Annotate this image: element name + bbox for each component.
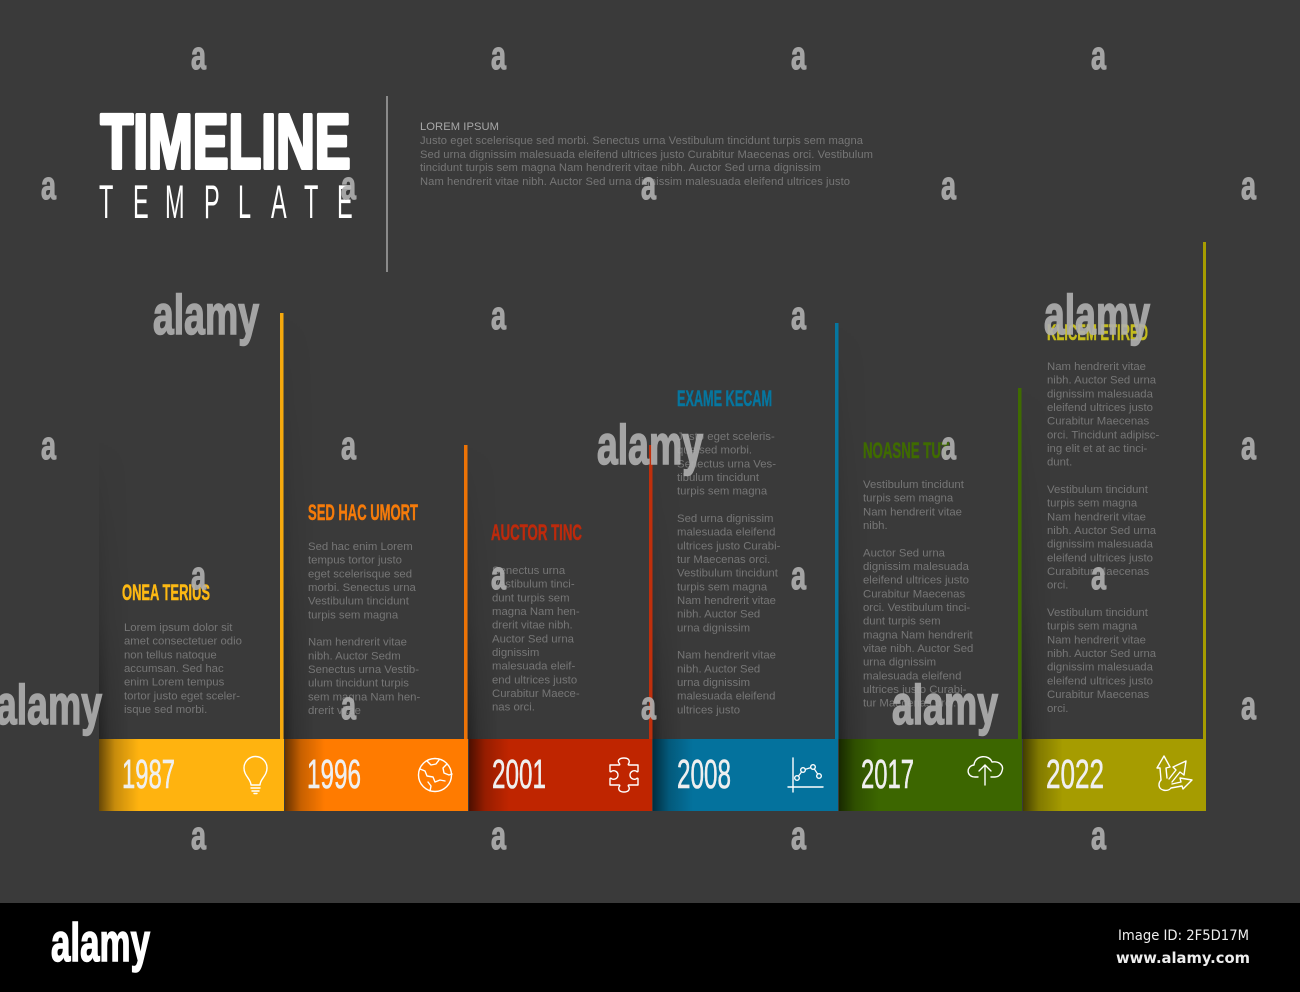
text 1996: Vestibulum tincidunt bbox=[308, 596, 410, 608]
text 2001: malesuada eleif- bbox=[492, 661, 575, 673]
text 1987: isque sed morbi. bbox=[124, 704, 207, 716]
text 2008: ultrices justo Curabi- bbox=[677, 540, 781, 552]
text 2022: dignissim malesuada bbox=[1047, 388, 1154, 400]
column 5: 2017 bbox=[839, 388, 1022, 811]
icon: line chart bbox=[788, 758, 823, 792]
text 2017: Auctor Sed urna bbox=[863, 547, 946, 559]
text 2008: urna dignissim bbox=[677, 677, 750, 689]
watermarks: a bbox=[491, 34, 507, 78]
text 2001: Auctor Sed urna bbox=[492, 633, 575, 645]
text 2017: eleifend ultrices justo bbox=[863, 575, 969, 587]
text 2001: end ultrices justo bbox=[492, 674, 577, 686]
watermarks: a bbox=[941, 164, 957, 208]
text 1987: enim Lorem tempus bbox=[124, 677, 225, 689]
year 2001: 2001 bbox=[492, 751, 546, 797]
watermarks: a bbox=[491, 814, 507, 858]
text 2017: malesuada eleifend bbox=[863, 670, 961, 682]
title: TEMPLATE bbox=[99, 175, 353, 228]
column 1: 1987 bbox=[99, 313, 284, 811]
column 6: 2022 bbox=[1023, 242, 1206, 811]
icon: light bulb bbox=[244, 756, 267, 794]
intro text: Justo eget scelerisque sed morbi. Senectus urna Vestibulum tincidunt turpis sem magna bbox=[420, 135, 864, 147]
text 1996: sem magna Nam hen- bbox=[308, 691, 420, 703]
text 2022: dunt. bbox=[1047, 457, 1072, 469]
text 2001: Senectus urna bbox=[492, 565, 566, 577]
text 2022: Vestibulum tincidunt bbox=[1047, 607, 1149, 619]
text 2008: Sed urna dignissim bbox=[677, 513, 773, 525]
intro text bbox=[420, 121, 873, 188]
intro text: Nam hendrerit vitae nibh. Auctor Sed urna dignissim malesuada eleifend ultrices justo bbox=[420, 176, 850, 188]
year bar 1996 bbox=[285, 739, 468, 811]
watermarks: a bbox=[491, 554, 507, 598]
text 2022: nibh. Auctor Sed urna bbox=[1047, 375, 1157, 387]
watermarks: alamy bbox=[1044, 283, 1150, 346]
text 2022: nibh. Auctor Sed urna bbox=[1047, 525, 1157, 537]
watermarks: a bbox=[491, 294, 507, 338]
year 2008: 2008 bbox=[677, 751, 731, 797]
text 2022: Nam hendrerit vitae bbox=[1047, 361, 1146, 373]
text 2008: Nam hendrerit vitae bbox=[677, 650, 776, 662]
text 2008: malesuada eleifend bbox=[677, 527, 775, 539]
heading 2017: NOASNE TUT bbox=[863, 438, 949, 463]
text 2022: eleifend ultrices justo bbox=[1047, 552, 1153, 564]
watermarks: alamy bbox=[597, 413, 703, 476]
text 1996: tempus tortor justo bbox=[308, 555, 402, 567]
footer url: www.alamy.com bbox=[1116, 949, 1250, 967]
year 2022: 2022 bbox=[1046, 751, 1104, 797]
text 2017: nibh. bbox=[863, 520, 888, 532]
year bar 2001 bbox=[469, 739, 652, 811]
text 2017: Nam hendrerit vitae bbox=[863, 506, 962, 518]
text 2022: Curabitur Maecenas bbox=[1047, 566, 1149, 578]
text 1996: ulum tincidunt turpis bbox=[308, 678, 409, 690]
text 2008: nibh. Auctor Sed bbox=[677, 609, 760, 621]
text 2001: nas orci. bbox=[492, 702, 535, 714]
text 2008: turpis sem magna bbox=[677, 486, 768, 498]
text 1996: turpis sem magna bbox=[308, 609, 399, 621]
text 1987: amet consectetuer odio bbox=[124, 636, 242, 648]
text 1996: nibh. Auctor Sedm bbox=[308, 650, 401, 662]
heading 1987: ONEA TERIUS bbox=[122, 580, 210, 605]
watermarks: alamy bbox=[892, 673, 998, 736]
text 2022: Curabitur Maecenas bbox=[1047, 689, 1149, 701]
heading 1996: SED HAC UMORT bbox=[308, 500, 418, 525]
text 2017: ultrices justo Curabi- bbox=[863, 684, 967, 696]
text 1987: accumsan. Sed hac bbox=[124, 663, 224, 675]
watermarks: a bbox=[1091, 814, 1107, 858]
text 2017: magna Nam hendrerit bbox=[863, 629, 974, 641]
text 2008: Vestibulum tincidunt bbox=[677, 568, 779, 580]
title: TIMELINE bbox=[100, 99, 350, 185]
watermarks: a bbox=[1241, 424, 1257, 468]
text 2017: dunt turpis sem bbox=[863, 616, 941, 628]
watermarks: a bbox=[641, 684, 657, 728]
column 3: 2001 bbox=[469, 445, 652, 811]
watermarks: a bbox=[191, 554, 207, 598]
watermarks: a bbox=[191, 34, 207, 78]
text 2017: urna dignissim bbox=[863, 657, 936, 669]
intro text: tincidunt turpis sem magna Nam hendrerit vitae nibh. Auctor Sed urna dignissim bbox=[420, 162, 821, 174]
text 2022: orci. bbox=[1047, 580, 1068, 592]
icon: globe bbox=[418, 758, 452, 792]
image id: Image ID: 2F5D17M bbox=[1118, 928, 1249, 944]
footer logo: alamy bbox=[51, 913, 150, 973]
watermarks: a bbox=[791, 294, 807, 338]
stem 2008 bbox=[835, 323, 838, 739]
intro text: Sed urna dignissim malesuada eleifend ultrices justo Curabitur Maecenas orci. Vestibulum bbox=[420, 149, 873, 161]
year bar 2017 bbox=[839, 739, 1022, 811]
column 4: 2008 bbox=[653, 323, 838, 811]
text 2022: turpis sem magna bbox=[1047, 498, 1138, 510]
text 2022: eleifend ultrices justo bbox=[1047, 675, 1153, 687]
text 2017: vitae nibh. Auctor Sed bbox=[863, 643, 973, 655]
text 2001: dunt turpis sem bbox=[492, 592, 570, 604]
text 1996: Nam hendrerit vitae bbox=[308, 637, 407, 649]
column shadows bbox=[99, 576, 1186, 792]
watermarks: a bbox=[791, 554, 807, 598]
text 2017: Vestibulum tincidunt bbox=[863, 479, 965, 491]
text 1996: eget scelerisque sed bbox=[308, 568, 412, 580]
stem 2001 bbox=[649, 445, 652, 739]
text 2008: Justo eget sceleris- bbox=[677, 431, 775, 443]
text 2022: orci. Tincidunt adipisc- bbox=[1047, 429, 1159, 441]
text 1987: tortor justo eget sceler- bbox=[124, 690, 240, 702]
text 2017: Curabitur Maecenas bbox=[863, 588, 965, 600]
text 2008: tibulum tincidunt bbox=[677, 472, 760, 484]
text 2022: Nam hendrerit vitae bbox=[1047, 511, 1146, 523]
text 1996: drerit vitae bbox=[308, 705, 361, 717]
watermarks: a bbox=[1091, 554, 1107, 598]
text 2008: ultrices justo bbox=[677, 704, 740, 716]
watermarks: a bbox=[341, 424, 357, 468]
watermarks: a bbox=[341, 164, 357, 208]
header divider bbox=[386, 96, 388, 272]
stem 1987 bbox=[280, 313, 284, 739]
text 2008: Senectus urna Ves- bbox=[677, 458, 776, 470]
text 2022: orci. bbox=[1047, 703, 1068, 715]
stem 2017 bbox=[1018, 388, 1022, 739]
year 2017: 2017 bbox=[861, 751, 914, 797]
text 2017: orci. Vestibulum tinci- bbox=[863, 602, 970, 614]
year bar 2008 bbox=[653, 739, 838, 811]
text 2017: turpis sem magna bbox=[863, 493, 954, 505]
year 1987: 1987 bbox=[122, 751, 175, 797]
icon: puzzle piece bbox=[610, 758, 638, 792]
watermarks: a bbox=[941, 424, 957, 468]
text 2001: dignissim bbox=[492, 647, 539, 659]
title bbox=[99, 99, 353, 228]
stem 1996 bbox=[464, 445, 468, 739]
text 1996: Sed hac enim Lorem bbox=[308, 541, 413, 553]
text 2022: nibh. Auctor Sed urna bbox=[1047, 648, 1157, 660]
watermarks: a bbox=[191, 814, 207, 858]
year 1996: 1996 bbox=[307, 751, 361, 797]
watermarks: a bbox=[1091, 34, 1107, 78]
icon: cloud upload bbox=[968, 757, 1003, 785]
heading 2022: KLICEM ETIRED bbox=[1047, 320, 1148, 345]
text 1987: non tellus natoque bbox=[124, 649, 217, 661]
watermarks: alamy bbox=[153, 283, 259, 346]
text 2022: turpis sem magna bbox=[1047, 621, 1138, 633]
stem 2022 bbox=[1203, 242, 1206, 739]
text 2022: Curabitur Maecenas bbox=[1047, 416, 1149, 428]
text 1996: Senectus urna Vestib- bbox=[308, 664, 419, 676]
text 2008: turpis sem magna bbox=[677, 581, 768, 593]
text 2008: Nam hendrerit vitae bbox=[677, 595, 776, 607]
icon: diverging arrows bbox=[1157, 756, 1192, 790]
watermarks: a bbox=[1241, 164, 1257, 208]
watermarks: a bbox=[41, 164, 57, 208]
year bar 1987 bbox=[99, 739, 284, 811]
heading 2008: EXAME KECAM bbox=[677, 386, 772, 411]
text 1987: Lorem ipsum dolor sit bbox=[124, 622, 233, 634]
year bar 2022 bbox=[1023, 739, 1206, 811]
watermarks: a bbox=[791, 34, 807, 78]
text 2008: urna dignissim bbox=[677, 622, 750, 634]
watermarks: a bbox=[341, 684, 357, 728]
watermarks: a bbox=[641, 164, 657, 208]
watermarks: a bbox=[1241, 684, 1257, 728]
text 2001: Vestibulum tinci- bbox=[492, 579, 575, 591]
text 2001: magna Nam hen- bbox=[492, 606, 580, 618]
text 2017: tur Maecenas orci. bbox=[863, 698, 956, 710]
intro text: LOREM IPSUM bbox=[420, 121, 499, 133]
text 2022: Nam hendrerit vitae bbox=[1047, 634, 1146, 646]
text 2008: que sed morbi. bbox=[677, 445, 752, 457]
text 2022: eleifend ultrices justo bbox=[1047, 402, 1153, 414]
text 2008: nibh. Auctor Sed bbox=[677, 663, 760, 675]
text 2001: drerit vitae nibh. bbox=[492, 620, 573, 632]
text 2008: tur Maecenas orci. bbox=[677, 554, 770, 566]
text 2022: dignissim malesuada bbox=[1047, 662, 1154, 674]
text 2008: malesuada eleifend bbox=[677, 691, 775, 703]
watermarks: a bbox=[41, 424, 57, 468]
heading 2001: AUCTOR TINC bbox=[491, 520, 582, 545]
text 2017: dignissim malesuada bbox=[863, 561, 970, 573]
text 2022: Vestibulum tincidunt bbox=[1047, 484, 1149, 496]
column 2: 1996 bbox=[285, 445, 468, 811]
text 2022: dignissim malesuada bbox=[1047, 539, 1154, 551]
watermarks: alamy bbox=[0, 673, 102, 736]
text 2001: Curabitur Maece- bbox=[492, 688, 580, 700]
watermarks: a bbox=[791, 814, 807, 858]
footer band bbox=[0, 903, 1300, 992]
text 2022: ing elit et at ac tinci- bbox=[1047, 443, 1147, 455]
text 1996: morbi. Senectus urna bbox=[308, 582, 417, 594]
